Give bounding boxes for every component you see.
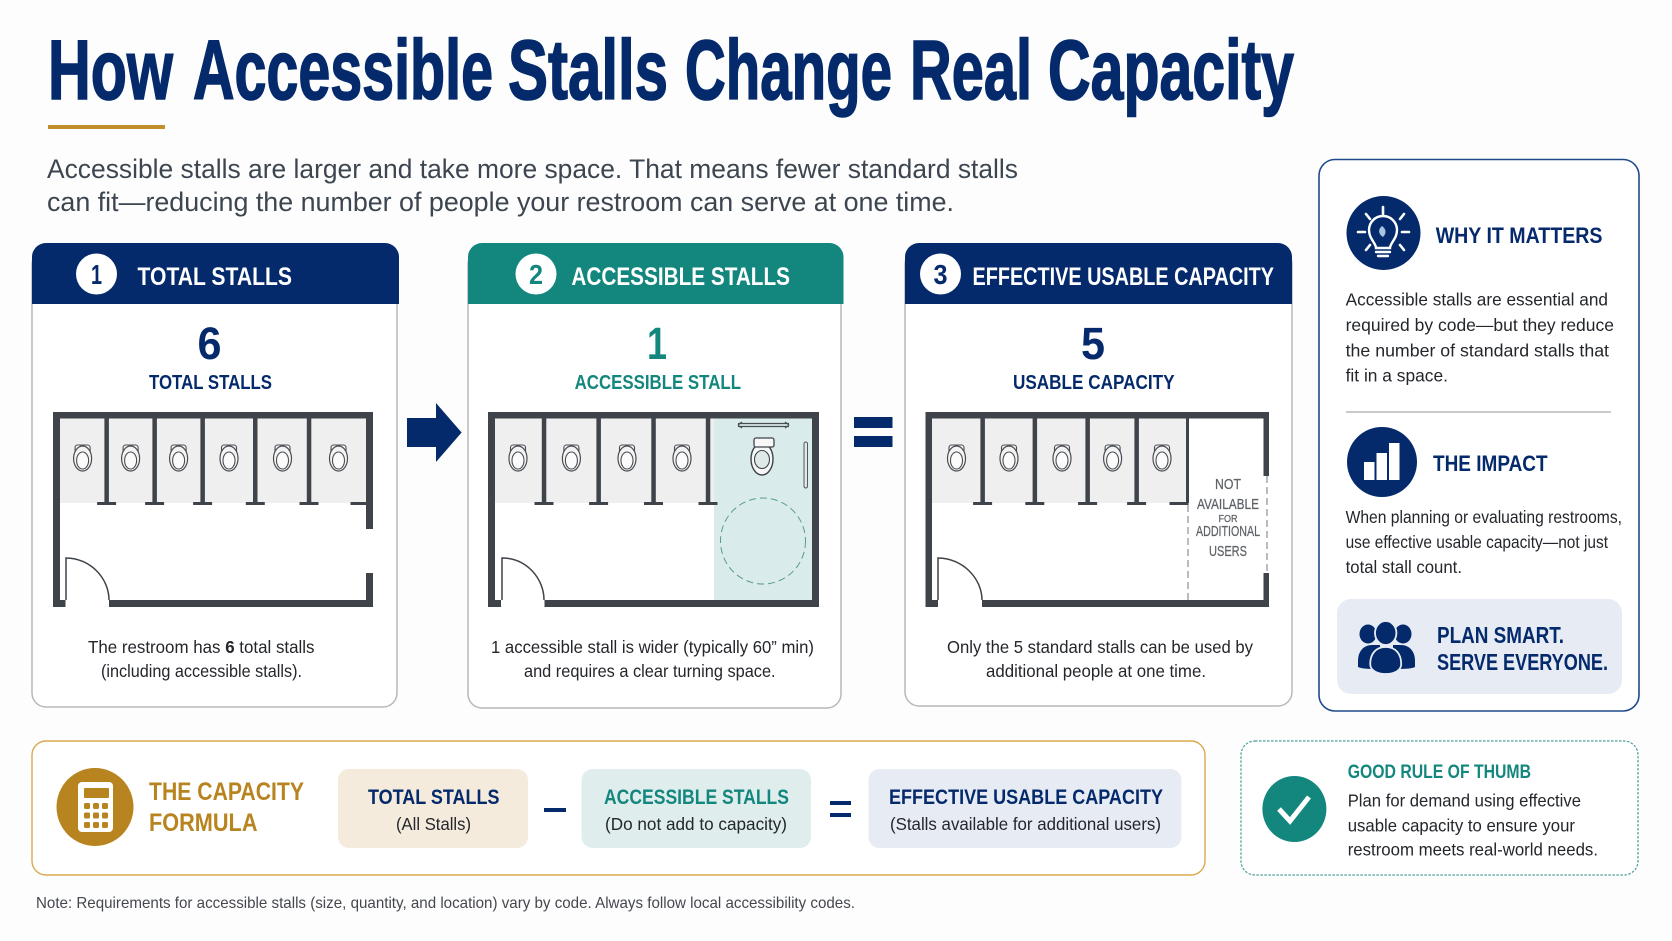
- equals sign: [830, 801, 851, 817]
- label: not available for additional users: FOR: [1218, 513, 1238, 525]
- caption: accessible stalls: and requires a clear turning space.: [524, 661, 776, 681]
- formula term: accessible stalls: (Do not add to capacity): [605, 814, 787, 834]
- label: not available for additional users: [1196, 476, 1260, 560]
- body: the impact: use effective usable capacity—not just: [1346, 532, 1608, 552]
- label: not available for additional users: AVAILABLE: [1197, 496, 1259, 513]
- body: why it matters: Accessible stalls are essential and: [1346, 290, 1608, 310]
- heading: the impact: THE IMPACT: [1433, 451, 1548, 476]
- body: the impact: When planning or evaluating restrooms,: [1346, 507, 1622, 527]
- panel header: total stalls: TOTAL STALLS: [138, 263, 292, 291]
- panel header: accessible stalls: ACCESSIBLE STALLS: [571, 263, 790, 291]
- caption: usable capacity: Only the 5 standard stalls can be used by: [947, 637, 1253, 657]
- subtitle: Accessible stalls are larger and take more space. That means fewer standard stalls: [47, 154, 1018, 184]
- big number: 1 accessible stall: ACCESSIBLE STALL: [575, 372, 741, 394]
- caption: accessible stalls: [491, 637, 814, 681]
- body: why it matters: [1346, 290, 1614, 386]
- body: why it matters: the number of standard stalls that: [1346, 340, 1609, 360]
- heading: the capacity formula: FORMULA: [149, 809, 258, 837]
- arrow: [407, 403, 462, 462]
- formula term: effective usable capacity: EFFECTIVE USABLE CAPACITY: [889, 786, 1163, 809]
- big number: 5 usable capacity: USABLE CAPACITY: [1013, 372, 1175, 394]
- formula term: effective usable capacity: [868, 769, 1181, 848]
- body: good rule of thumb: usable capacity to ensure your: [1348, 816, 1575, 836]
- label: not available for additional users: NOT: [1215, 476, 1241, 493]
- callout: plan smart: PLAN SMART.: [1437, 622, 1564, 648]
- big number: 5 usable capacity: 5: [1081, 318, 1105, 369]
- label: not available for additional users: USERS: [1209, 543, 1247, 560]
- big number: 6 total stalls: [149, 318, 272, 394]
- icon: calculator: [56, 768, 134, 846]
- caption: usable capacity: [947, 637, 1253, 681]
- big number: 6 total stalls: 6: [198, 318, 222, 369]
- title: Stalls: [508, 23, 668, 117]
- caption: accessible stalls: 1 accessible stall is wider (typically 60” min): [491, 637, 814, 657]
- body: good rule of thumb: restroom meets real-world needs.: [1348, 840, 1598, 860]
- title: [48, 23, 1294, 117]
- subtitle: [47, 154, 1018, 217]
- heading: the capacity formula: [149, 778, 304, 837]
- panel: capacity formula: [32, 741, 1205, 875]
- floor plan: 6 stalls: [53, 412, 373, 607]
- callout: plan smart: [1337, 599, 1622, 694]
- equals sign: [854, 417, 892, 447]
- body: good rule of thumb: [1348, 790, 1598, 860]
- caption: total stalls: [88, 637, 315, 681]
- icon: accessible toilet and grab bars: [738, 422, 808, 488]
- formula term: accessible stalls: [582, 769, 811, 848]
- callout: plan smart: SERVE EVERYONE.: [1437, 649, 1608, 675]
- floor plan: usable capacity: [926, 412, 1269, 607]
- panel: total stalls: [32, 243, 399, 707]
- panel header: total stalls: [32, 243, 399, 304]
- formula term: effective usable capacity: (Stalls available for additional users): [890, 814, 1161, 834]
- body: why it matters: fit in a space.: [1346, 366, 1448, 386]
- panel: accessible stalls: [468, 243, 844, 708]
- title: Real: [910, 23, 1032, 117]
- big number: 5 usable capacity: [1013, 318, 1175, 394]
- panel header: effective usable capacity: [905, 243, 1292, 304]
- title: Change: [685, 23, 892, 117]
- big number: 1 accessible stall: 1: [647, 318, 667, 369]
- formula term: accessible stalls: ACCESSIBLE STALLS: [604, 786, 789, 809]
- panel header: accessible stalls: 2: [529, 259, 543, 290]
- panel header: total stalls: 1: [91, 259, 102, 290]
- minus sign: [544, 808, 566, 812]
- big number: 1 accessible stall: [575, 318, 741, 394]
- big number: 6 total stalls: TOTAL STALLS: [149, 372, 272, 394]
- icon: bar chart: [1347, 427, 1417, 497]
- formula term: total stalls: TOTAL STALLS: [368, 786, 500, 809]
- heading: why it matters: WHY IT MATTERS: [1436, 223, 1602, 248]
- floor plan: accessible stall: [488, 412, 819, 607]
- title: Accessible: [193, 23, 493, 117]
- icon: light bulb: [1346, 196, 1420, 270]
- formula term: total stalls: (All Stalls): [396, 814, 471, 834]
- title: How: [48, 23, 173, 117]
- caption: usable capacity: additional people at one time.: [986, 661, 1206, 681]
- body: why it matters: required by code—but they reduce: [1346, 315, 1614, 335]
- body: good rule of thumb: Plan for demand using effective: [1348, 790, 1581, 810]
- panel header: effective usable capacity: 3: [934, 259, 948, 290]
- panel: sidebar: [1319, 160, 1639, 711]
- title: Capacity: [1048, 23, 1294, 117]
- heading: the capacity formula: THE CAPACITY: [149, 778, 304, 806]
- turning space circle: [720, 498, 806, 584]
- panel: effective usable capacity: [905, 243, 1292, 706]
- icon: check mark: [1262, 776, 1326, 842]
- icon: people: [1358, 621, 1415, 674]
- subtitle: can fit—reducing the number of people your restroom can serve at one time.: [47, 187, 954, 217]
- caption: total stalls: (including accessible stalls).: [101, 661, 302, 681]
- label: not available for additional users: ADDITIONAL: [1196, 523, 1260, 540]
- body: the impact: total stall count.: [1346, 557, 1462, 577]
- panel header: accessible stalls: [468, 243, 844, 304]
- caption: total stalls: The restroom has 6 total stalls: [88, 637, 315, 657]
- formula term: total stalls: [338, 769, 528, 848]
- footnote: Note: Requirements for accessible stalls (size, quantity, and location) vary by code. Always follow local accessibility codes.: [36, 895, 855, 912]
- panel header: effective usable capacity: EFFECTIVE USABLE CAPACITY: [972, 263, 1274, 291]
- panel: good rule of thumb: [1241, 741, 1638, 875]
- heading: good rule of thumb: GOOD RULE OF THUMB: [1348, 762, 1531, 783]
- body: the impact: [1346, 507, 1622, 577]
- title underline: [48, 125, 165, 129]
